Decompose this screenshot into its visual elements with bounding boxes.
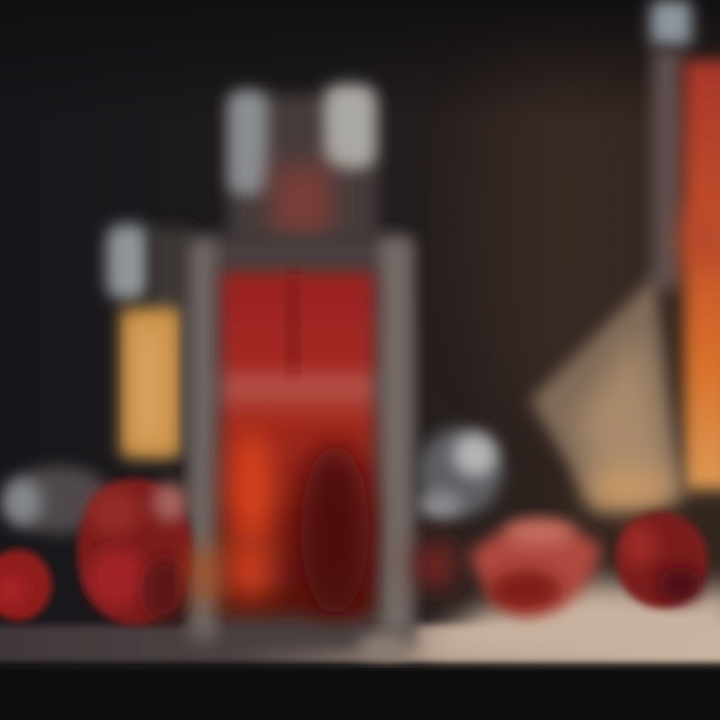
red liquid <box>222 272 374 617</box>
glass shape left <box>2 466 112 534</box>
table surface <box>0 580 720 720</box>
small glass jar <box>413 428 502 589</box>
bowl of red liquid <box>470 519 602 616</box>
bottle glass body <box>188 235 414 650</box>
bottle base highlight <box>357 634 413 658</box>
pomegranate far left <box>0 549 52 621</box>
small tube left <box>106 224 192 458</box>
bottle neck and caps <box>228 84 378 240</box>
conical flask right <box>530 275 680 510</box>
tall bottle right <box>650 0 720 490</box>
pomegranate left <box>77 478 219 626</box>
central bottle <box>188 84 414 658</box>
pomegranate right <box>616 512 708 608</box>
